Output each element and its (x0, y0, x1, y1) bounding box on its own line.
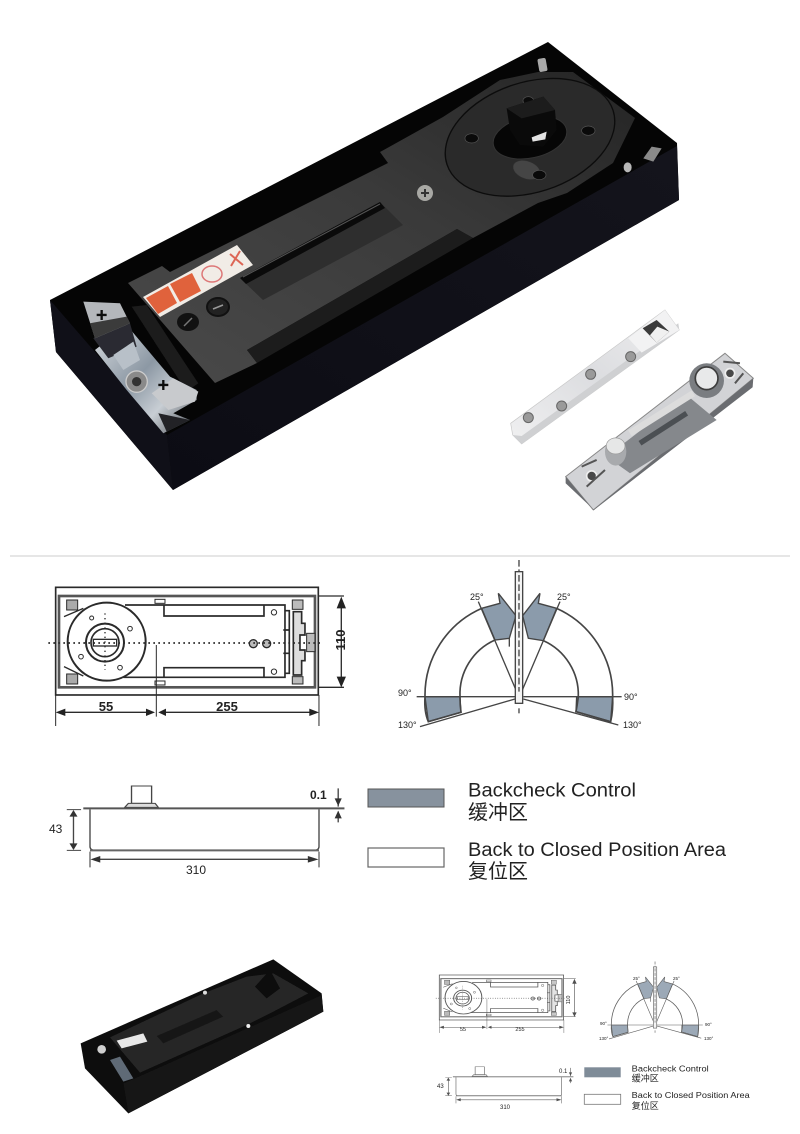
side view dimension drawing (49, 786, 344, 877)
warning label (143, 245, 253, 317)
box front side (167, 146, 679, 490)
small angle diagram: 130° (704, 1036, 714, 1041)
spindle post (489, 97, 571, 165)
side dimension labels: 43 (49, 822, 63, 836)
bottom pivot photo (566, 353, 753, 510)
top pivot plate photo (511, 310, 679, 444)
angle labels: 90° (398, 688, 412, 698)
angle labels (398, 592, 642, 730)
small angle diagram: 90° (600, 1021, 607, 1026)
small plan view: 55 (460, 1027, 466, 1033)
side dimension labels (49, 788, 327, 877)
plan view dimension drawing (48, 587, 348, 726)
plan dimension labels: 255 (216, 699, 238, 714)
legend: backcheck control (368, 780, 636, 825)
small legend: 复位区 (632, 1099, 659, 1112)
small legend: Back to Closed Position Area (632, 1091, 750, 1100)
legend: backcheck control: 缓冲区 (468, 796, 528, 825)
end bracket hardware (83, 302, 198, 433)
slot recess (240, 202, 403, 300)
side dimension labels: 310 (186, 863, 206, 877)
side dimension labels: 0.1 (310, 788, 327, 802)
small legend: 缓冲区 (632, 1072, 659, 1084)
plate screws (177, 185, 433, 331)
legend (368, 780, 726, 884)
protruding screws (537, 58, 662, 172)
small legend: Backcheck Control (632, 1064, 709, 1074)
small plan view: 110 (566, 996, 572, 1004)
legend: back to closed position area: 复位区 (468, 855, 528, 884)
main product photo: floor spring box (50, 42, 679, 490)
box outer body (50, 42, 679, 490)
plan dimension labels (99, 630, 348, 714)
small legend (584, 1064, 750, 1112)
small angle diagram: 90° (705, 1022, 712, 1027)
small product photo (81, 959, 323, 1113)
angle labels: 130° (398, 720, 417, 730)
cover plate (128, 72, 635, 383)
divider line (10, 555, 790, 557)
small composite dimension drawing (436, 961, 750, 1112)
small side view: 0.1 (559, 1069, 568, 1075)
plan dimension labels: 110 (333, 630, 348, 650)
small side view: 310 (500, 1105, 511, 1111)
small side view: 43 (437, 1084, 444, 1090)
legend: back to closed position area: Back to Closed Position Area (468, 840, 726, 861)
angle labels: 25° (557, 592, 571, 602)
spindle plate (430, 58, 630, 217)
small side view (437, 1067, 573, 1111)
box left side (50, 300, 173, 490)
angle labels: 25° (470, 592, 484, 602)
plan dimension labels: 55 (99, 699, 113, 714)
small plan view: 255 (515, 1027, 525, 1033)
foam strip (247, 229, 473, 363)
legend: backcheck control: Backcheck Control (468, 780, 636, 802)
small angle diagram (599, 961, 714, 1041)
angle labels: 130° (623, 720, 642, 730)
legend: back to closed position area (368, 840, 726, 884)
small angle diagram: 25° (633, 976, 640, 981)
small plan view (436, 975, 577, 1033)
small angle diagram: 25° (673, 976, 680, 981)
small angle diagram: 130° (599, 1036, 609, 1041)
angle labels: 90° (624, 692, 638, 702)
door swing angle diagram (398, 560, 642, 730)
